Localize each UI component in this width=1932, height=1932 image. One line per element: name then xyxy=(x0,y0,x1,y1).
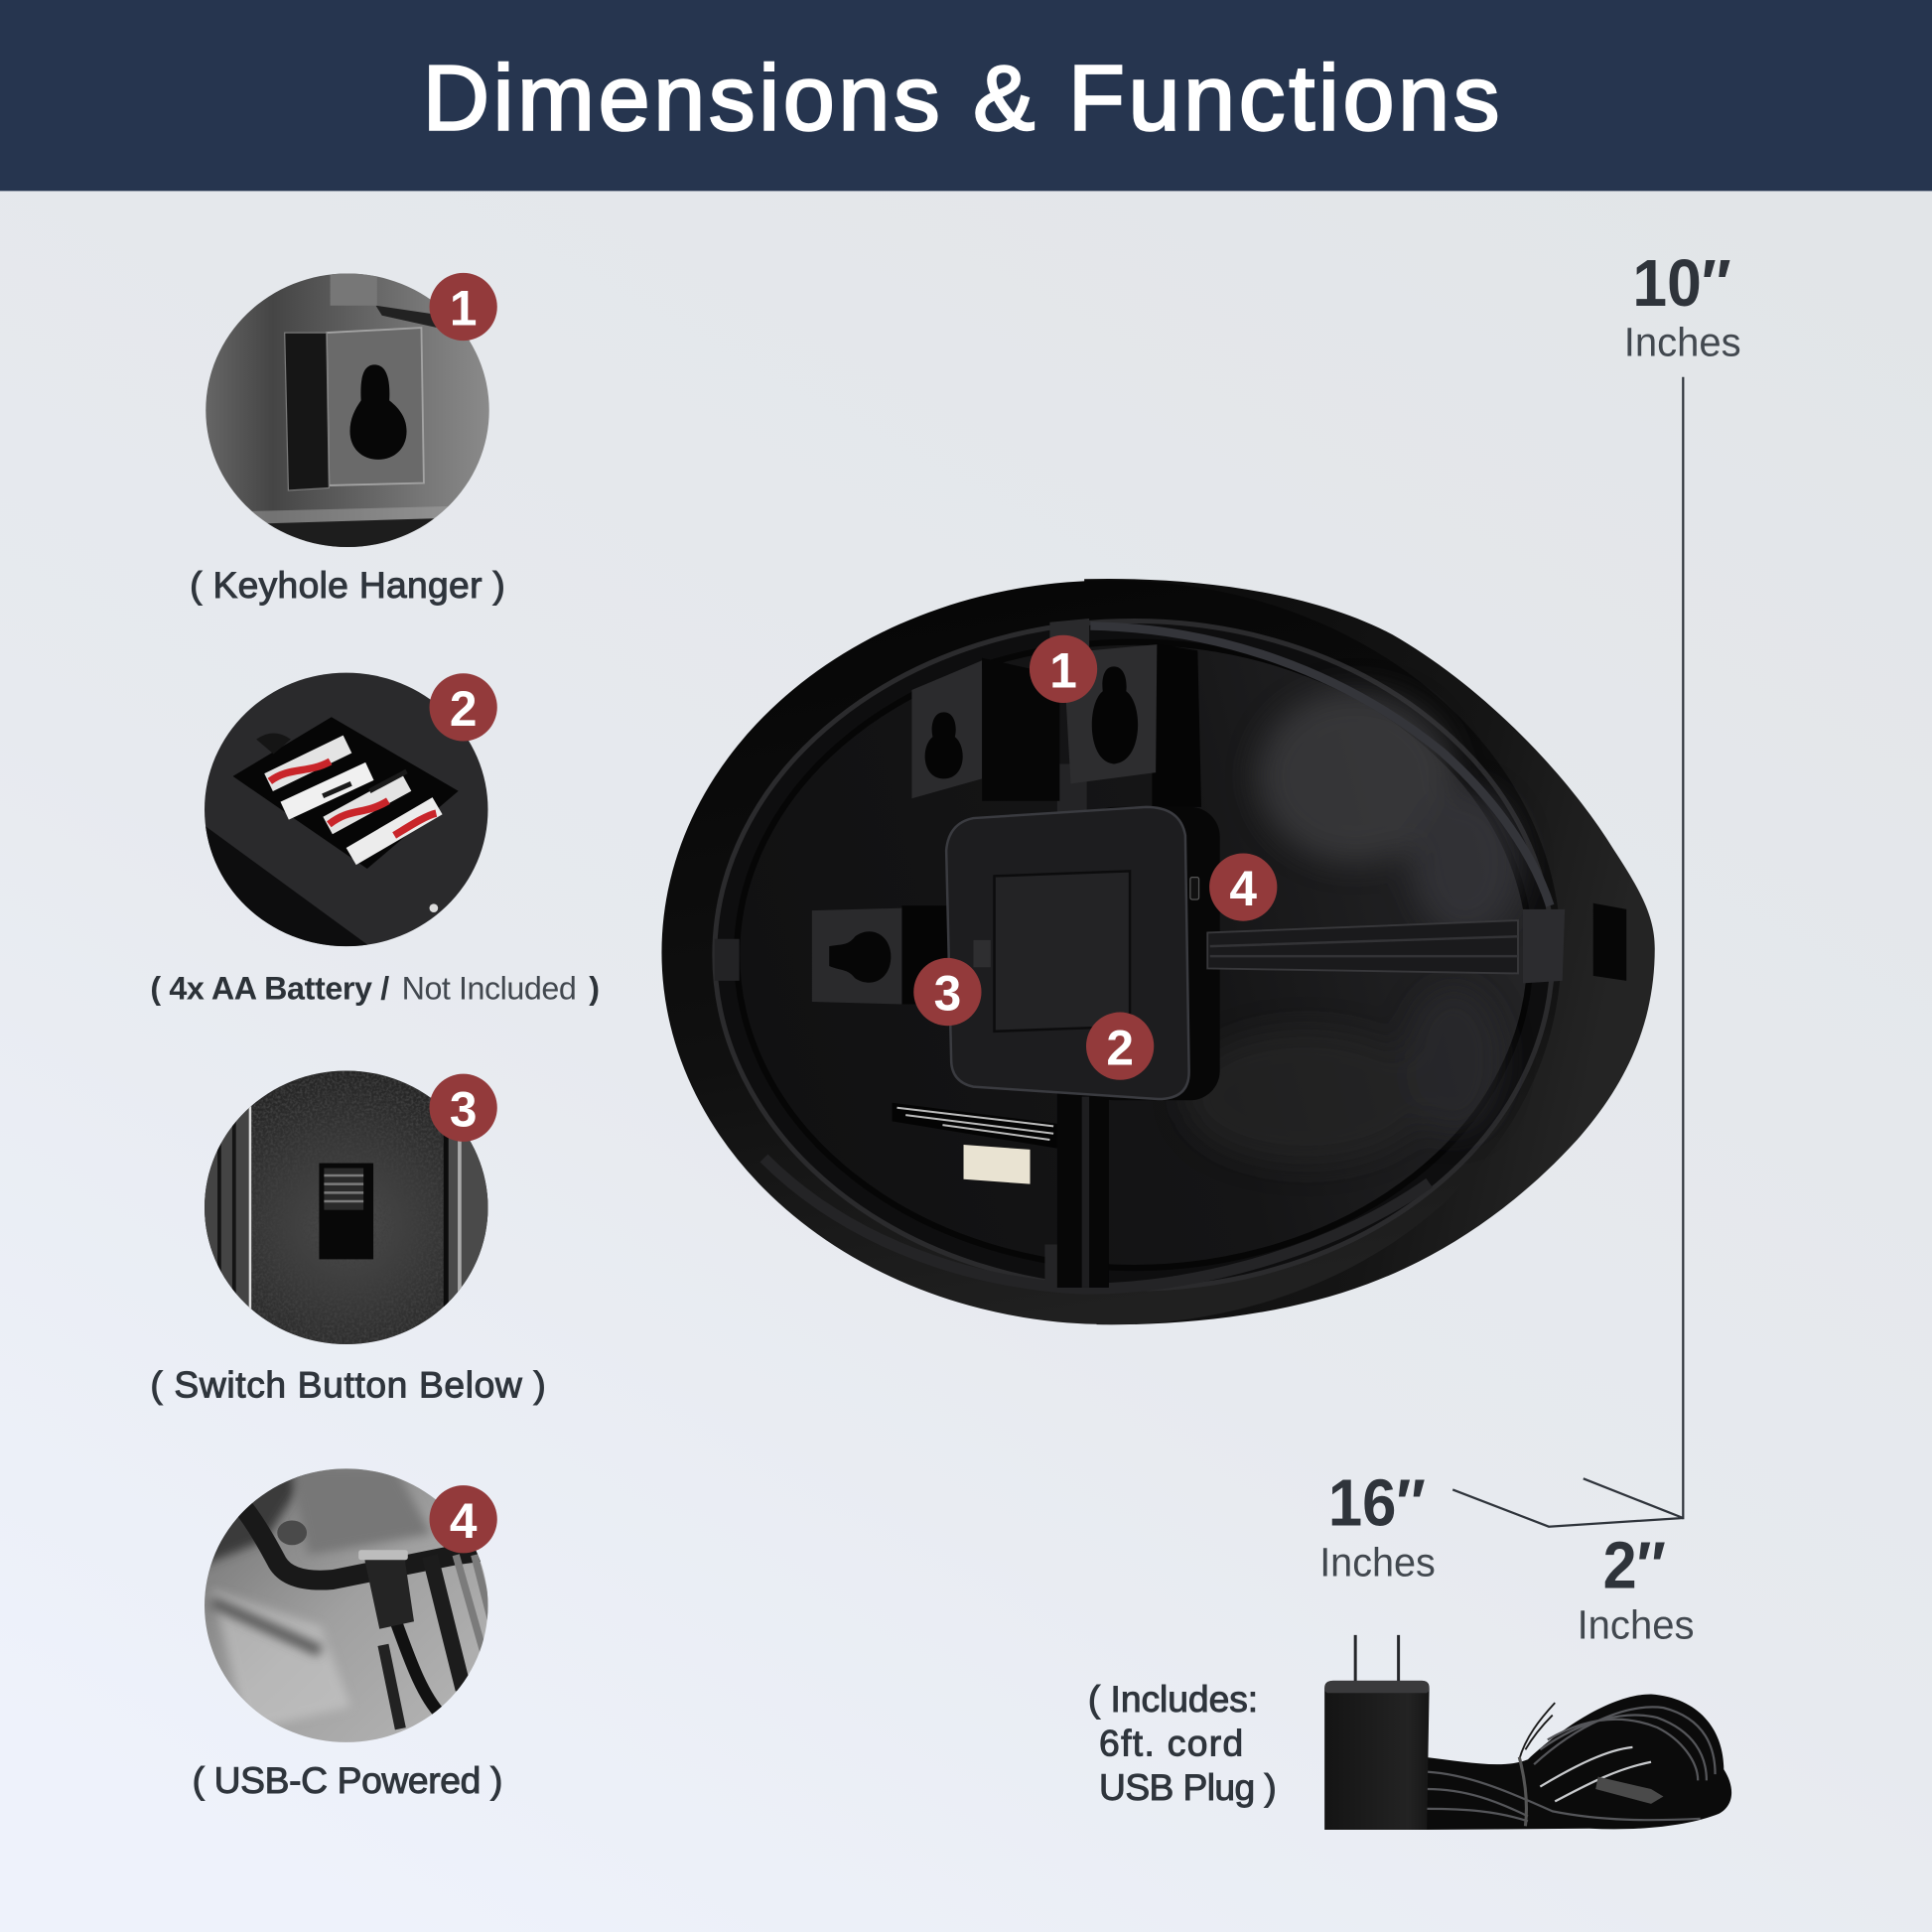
movement shadow xyxy=(1084,807,1220,1100)
label: ( USB-C Powered ) xyxy=(193,1759,502,1801)
panel: USB-C xyxy=(185,1453,502,1801)
panel: battery xyxy=(150,665,600,1007)
keyhole plate left xyxy=(911,660,982,798)
lower block xyxy=(901,905,951,1004)
keyhole plate right xyxy=(1063,644,1157,783)
photo: battery compartment xyxy=(205,673,488,947)
front rim xyxy=(661,581,1561,1324)
movement box xyxy=(946,807,1189,1099)
adapter body xyxy=(1324,1681,1430,1830)
bar clamp xyxy=(1523,909,1565,983)
badge 4: 4 xyxy=(450,1493,478,1549)
badge 1 xyxy=(430,273,497,341)
includes note: 6ft. cord xyxy=(1099,1723,1243,1764)
label: ( Switch Button Below ) xyxy=(150,1363,546,1405)
keyhole plate lower xyxy=(812,908,901,1004)
cord strands xyxy=(1427,1707,1716,1821)
dimension: height 10 inches: Inches xyxy=(1624,320,1741,365)
photo: USB-C port xyxy=(205,1468,488,1742)
badge 4 xyxy=(430,1485,497,1553)
dimension: height 10 inches: 10″ xyxy=(1632,246,1731,321)
dimension lines xyxy=(1452,377,1683,1527)
dimension: width 16 inches: 16″ xyxy=(1328,1465,1426,1540)
includes note: ( Includes: xyxy=(1088,1678,1258,1720)
dimension: depth 2 inches xyxy=(1578,1529,1694,1648)
badge 3 xyxy=(430,1074,497,1142)
keyhole block left xyxy=(982,658,1059,801)
clips on ring xyxy=(715,939,740,981)
number badges on clock xyxy=(913,635,1277,1080)
upper rib xyxy=(1057,763,1087,826)
bar groove xyxy=(1210,936,1518,956)
cord bundle xyxy=(1425,1694,1731,1830)
badge 3 xyxy=(913,958,982,1026)
movement cover xyxy=(995,871,1130,1032)
bottom clip xyxy=(1044,1244,1084,1290)
dimension: depth 2 inches: Inches xyxy=(1578,1602,1694,1648)
reversed label xyxy=(893,1103,1057,1149)
prongs xyxy=(1355,1635,1399,1683)
dimension: depth 2 inches: 2″ xyxy=(1603,1529,1666,1603)
includes note xyxy=(1088,1678,1277,1808)
badge 1: 1 xyxy=(1049,643,1077,699)
dimension: width 16 inches xyxy=(1319,1465,1436,1585)
badge 3: 3 xyxy=(450,1081,477,1137)
top small plate xyxy=(1049,619,1089,658)
badge 2 xyxy=(1086,1013,1154,1080)
badge 2: 2 xyxy=(450,681,477,737)
keyhole right hole xyxy=(1092,666,1138,763)
badge 2 xyxy=(430,673,497,742)
ring xyxy=(715,621,1553,1289)
photo: clock back xyxy=(661,579,1655,1324)
header band xyxy=(0,0,1932,191)
cord highlights xyxy=(1540,1747,1651,1801)
upper black block xyxy=(1152,643,1201,807)
title: Dimensions & Functions xyxy=(423,46,1499,149)
USB-C tip xyxy=(1595,1777,1663,1804)
clock body silhouette xyxy=(1084,579,1655,1324)
vertical rib xyxy=(1057,1090,1109,1288)
photo: keyhole xyxy=(206,274,489,547)
photo: USB adapter and cord xyxy=(1324,1635,1731,1830)
horizontal bar xyxy=(1207,920,1518,973)
includes note: USB Plug ) xyxy=(1099,1766,1277,1808)
ring lower arc xyxy=(763,1159,1430,1289)
panel: keyhole hanger xyxy=(190,265,505,606)
badge 1 xyxy=(1030,635,1097,703)
USB port xyxy=(1190,878,1199,899)
keyhole left hole xyxy=(925,712,963,778)
panel: switch xyxy=(150,1066,546,1405)
badge 3: 3 xyxy=(934,966,961,1022)
adapter cap xyxy=(1324,1681,1430,1693)
photo: switch xyxy=(205,1070,488,1344)
dimension: height 10 inches xyxy=(1624,246,1741,365)
stray wires xyxy=(1519,1703,1555,1759)
cable tie xyxy=(1519,1757,1526,1826)
dimension: width 16 inches: Inches xyxy=(1319,1539,1436,1585)
highlighted top ring arc xyxy=(1090,625,1550,905)
badge 4: 4 xyxy=(1229,861,1257,916)
label xyxy=(150,971,600,1007)
badge 2: 2 xyxy=(1106,1020,1134,1075)
label: Not Included xyxy=(402,971,577,1007)
label: ) xyxy=(589,971,600,1007)
badge 1: 1 xyxy=(450,281,477,337)
gloss highlights xyxy=(1182,690,1522,1165)
switch xyxy=(973,940,991,967)
label: ( Keyhole Hanger ) xyxy=(190,564,505,606)
side slot xyxy=(1593,903,1626,981)
inner face xyxy=(737,642,1530,1268)
warning sticker xyxy=(964,1145,1031,1184)
badge 4 xyxy=(1209,853,1277,921)
label: ( 4x AA Battery / xyxy=(150,971,389,1007)
keyhole lower hole xyxy=(829,931,891,983)
